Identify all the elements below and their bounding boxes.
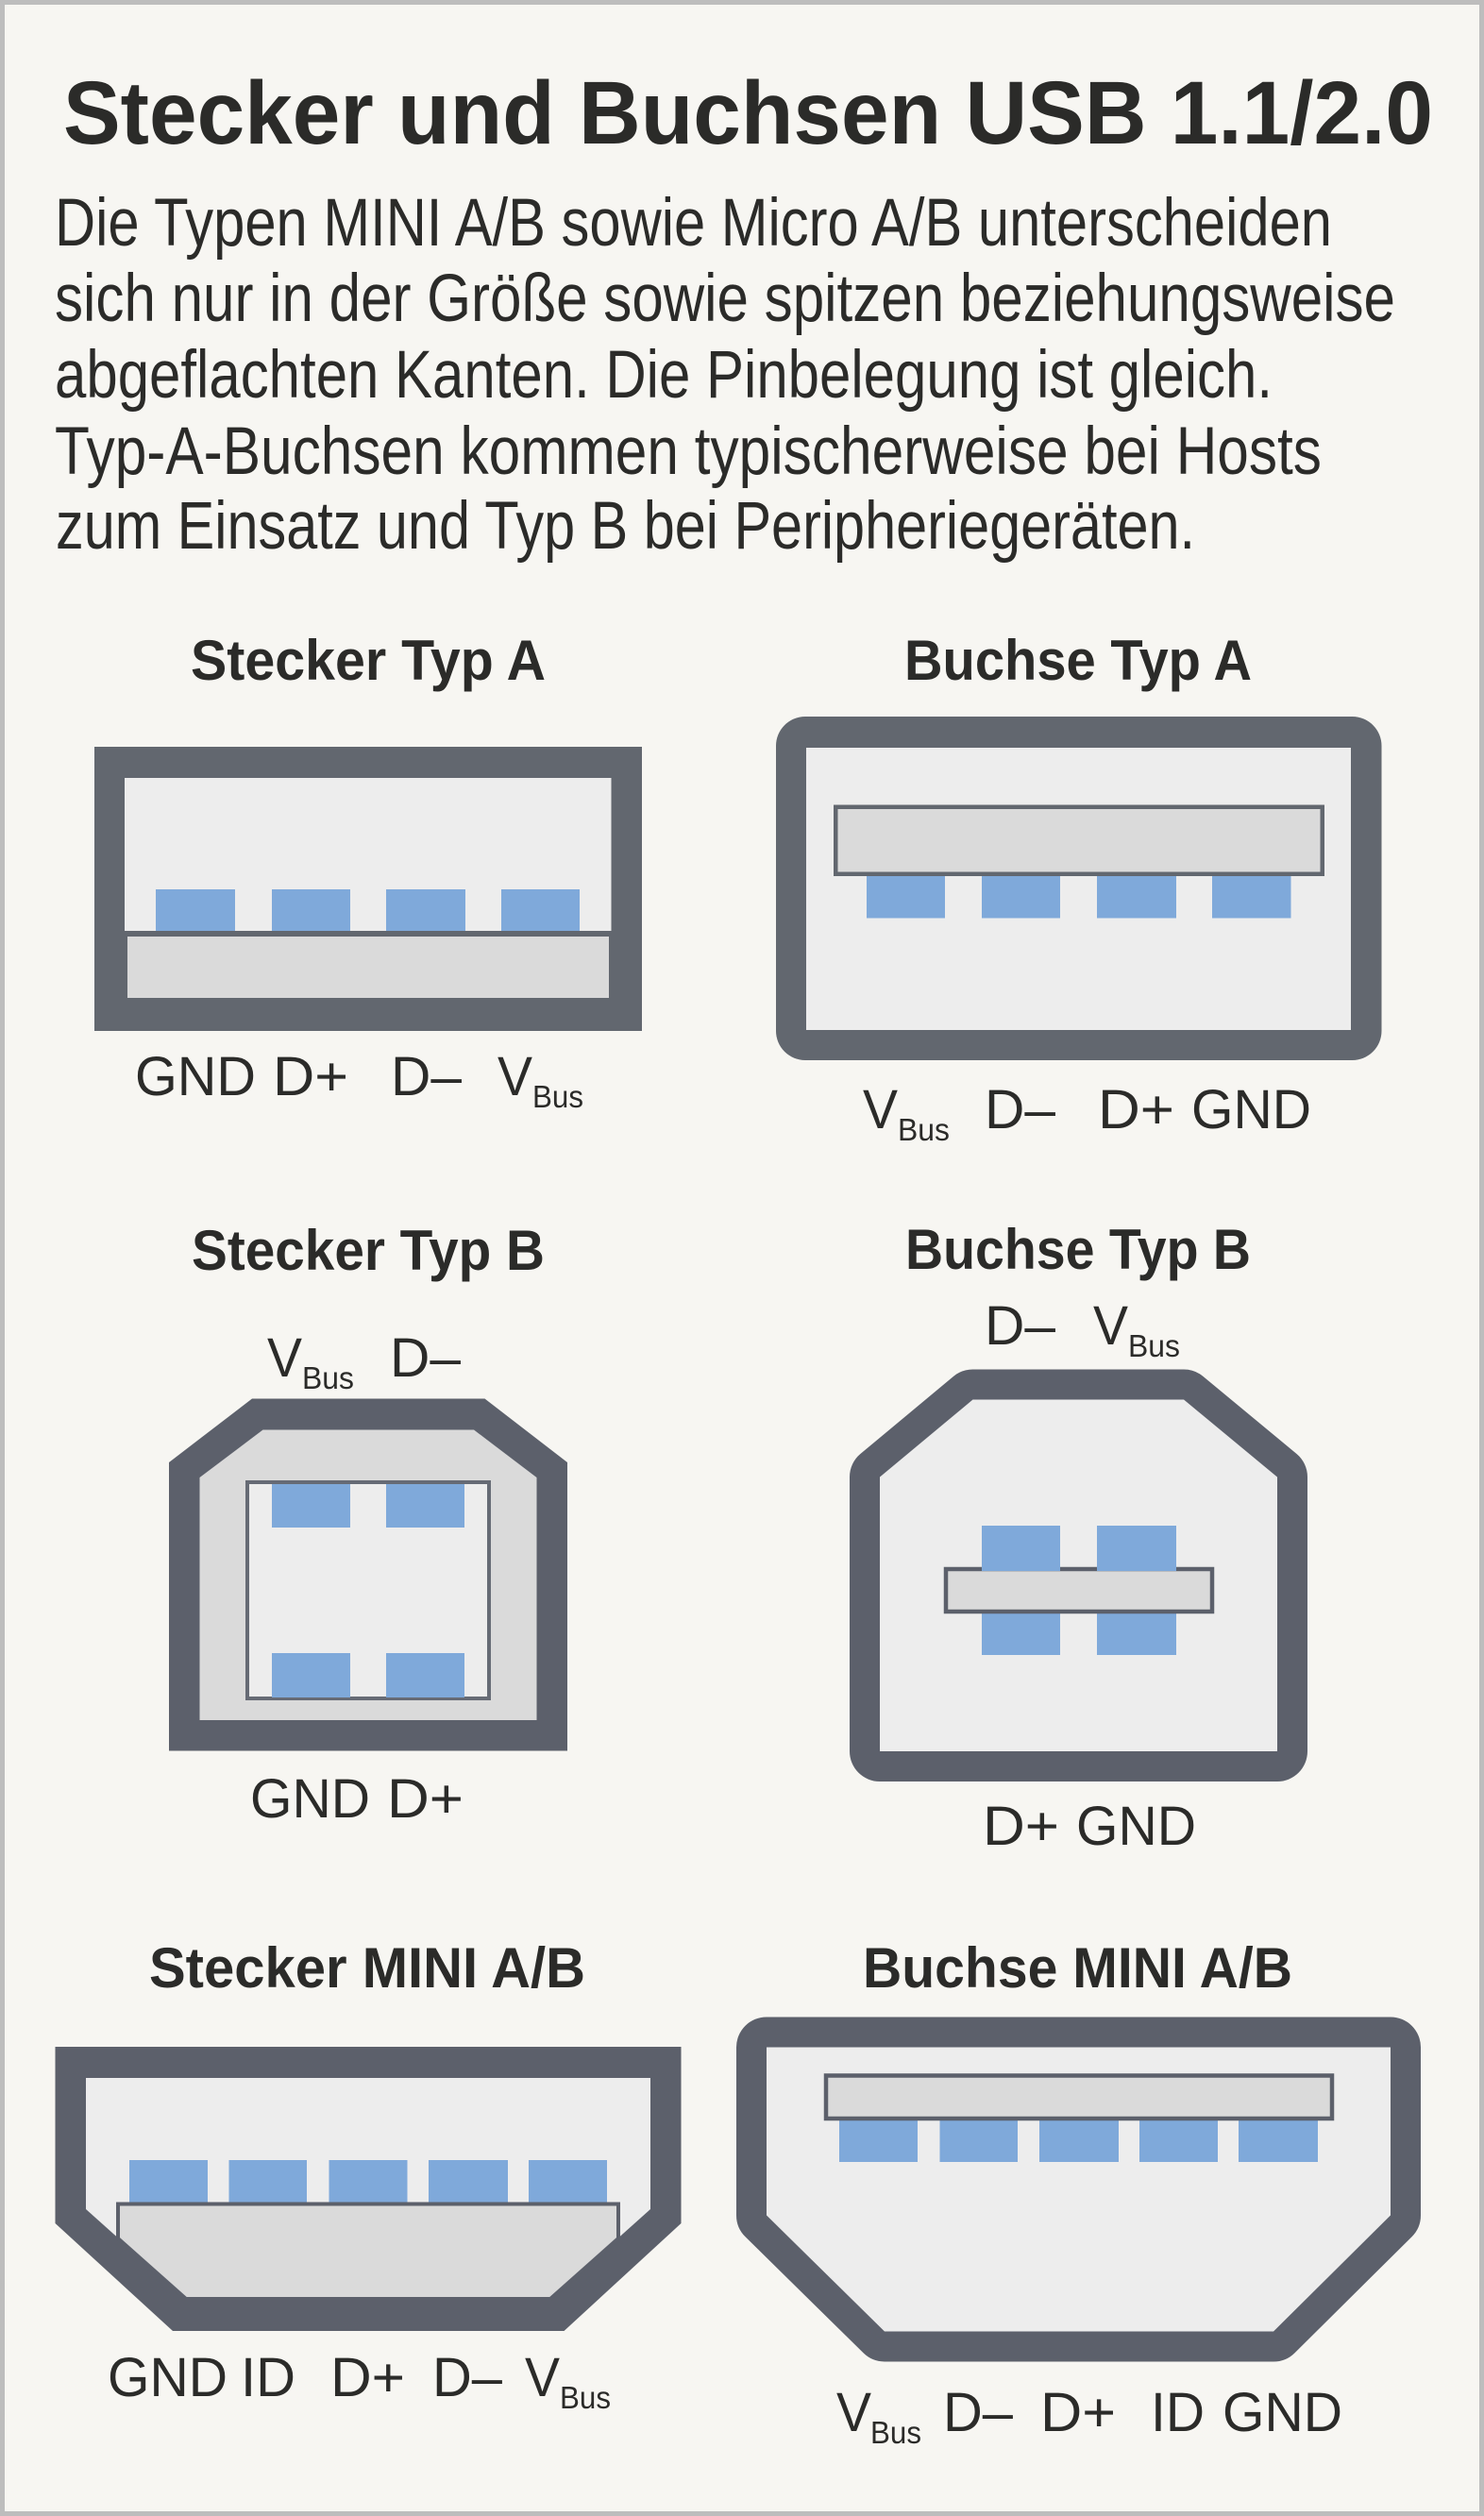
pin labels: Stecker Typ A: Bus	[532, 1079, 583, 1114]
top pin labels: Buchse Typ B: D–	[985, 1295, 1056, 1357]
panel: Buchse MINI A/B	[767, 1936, 1391, 2450]
pin labels: Buchse Typ A: GND	[1191, 1079, 1311, 1140]
connector diagram: Stecker Typ A	[94, 747, 642, 1031]
bottom pin labels: Stecker Typ B: GND	[250, 1768, 370, 1830]
pin labels: Stecker MINI A/B: D–	[432, 2347, 503, 2408]
pin labels: Stecker MINI A/B: D+	[330, 2347, 405, 2408]
heading: Buchse Typ A: Buchse Typ A	[904, 629, 1252, 692]
top pin labels: Buchse Typ B: Bus	[1128, 1328, 1180, 1363]
bottom pin labels: Buchse Typ B: D+	[983, 1796, 1059, 1857]
panel: Stecker Typ A	[94, 629, 642, 1114]
heading: Buchse MINI A/B: Buchse MINI A/B	[863, 1936, 1292, 2000]
heading: Stecker Typ A: Stecker Typ A	[191, 629, 546, 692]
title: Stecker und Buchsen USB 1.1/2.0	[63, 63, 1433, 163]
top pin labels: Stecker Typ B: Bus	[302, 1360, 354, 1395]
intro text block: zum Einsatz und Typ B bei Peripheriegeräten.	[56, 489, 1195, 564]
pin labels: Stecker Typ A: GND	[135, 1046, 256, 1107]
pin labels: Buchse MINI A/B	[836, 2382, 1342, 2450]
pin labels: Stecker MINI A/B: ID	[241, 2347, 295, 2408]
heading: Buchse Typ B: Buchse Typ B	[905, 1218, 1251, 1281]
pin labels: Stecker MINI A/B	[108, 2347, 611, 2415]
pin labels: Stecker MINI A/B: V	[525, 2347, 560, 2408]
top pin labels: Stecker Typ B	[267, 1327, 462, 1395]
pin labels: Buchse Typ A: D–	[985, 1079, 1056, 1140]
intro text block: abgeflachten Kanten. Die Pinbelegung ist gleich.	[55, 338, 1273, 413]
connector diagram: Buchse Typ B	[880, 1399, 1277, 1751]
top pin labels: Stecker Typ B: D–	[390, 1327, 462, 1389]
pin labels: Buchse Typ A: D+	[1098, 1079, 1174, 1140]
top pin labels: Buchse Typ B: V	[1093, 1295, 1128, 1357]
pin labels: Stecker MINI A/B: Bus	[560, 2380, 611, 2415]
top pin labels: Stecker Typ B: V	[267, 1327, 302, 1389]
connector diagram: Buchse Typ A	[776, 717, 1382, 1060]
pin labels: Stecker Typ A	[135, 1046, 583, 1114]
pin labels: Buchse Typ A: Bus	[898, 1112, 950, 1147]
panel: Stecker MINI A/B	[55, 1936, 682, 2415]
panel: Stecker Typ B	[169, 1219, 567, 1830]
pin labels: Stecker MINI A/B: GND	[108, 2347, 228, 2408]
pin labels: Stecker Typ A: V	[497, 1046, 532, 1107]
bottom pin labels: Stecker Typ B	[250, 1768, 464, 1830]
pin labels: Buchse Typ A: V	[863, 1079, 898, 1140]
pin labels: Stecker Typ A: D–	[391, 1046, 463, 1107]
bottom pin labels: Stecker Typ B: D+	[387, 1768, 464, 1830]
top pin labels: Buchse Typ B	[985, 1295, 1180, 1363]
pin labels: Buchse MINI A/B: D–	[943, 2382, 1014, 2443]
bottom pin labels: Buchse Typ B: GND	[1076, 1796, 1196, 1857]
intro text block	[55, 186, 1395, 564]
bottom pin labels: Buchse Typ B	[983, 1796, 1196, 1857]
connector diagram: Stecker MINI A/B	[55, 2047, 682, 2331]
pin labels: Buchse MINI A/B: GND	[1223, 2382, 1342, 2443]
panel: Buchse Typ A	[776, 629, 1382, 1147]
pin labels: Buchse MINI A/B: D+	[1040, 2382, 1116, 2443]
pin labels: Stecker Typ A: D+	[273, 1046, 348, 1107]
pin labels: Buchse MINI A/B: Bus	[870, 2415, 921, 2450]
panel: Buchse Typ B	[880, 1218, 1277, 1857]
connector diagram: Stecker Typ B	[169, 1399, 567, 1750]
heading: Stecker MINI A/B: Stecker MINI A/B	[149, 1936, 585, 2000]
connector diagram: Buchse MINI A/B	[767, 2047, 1391, 2332]
pin labels: Buchse MINI A/B: ID	[1151, 2382, 1205, 2443]
pin labels: Buchse Typ A	[863, 1079, 1311, 1147]
pin labels: Buchse MINI A/B: V	[836, 2382, 871, 2443]
heading: Stecker Typ B: Stecker Typ B	[192, 1219, 545, 1282]
